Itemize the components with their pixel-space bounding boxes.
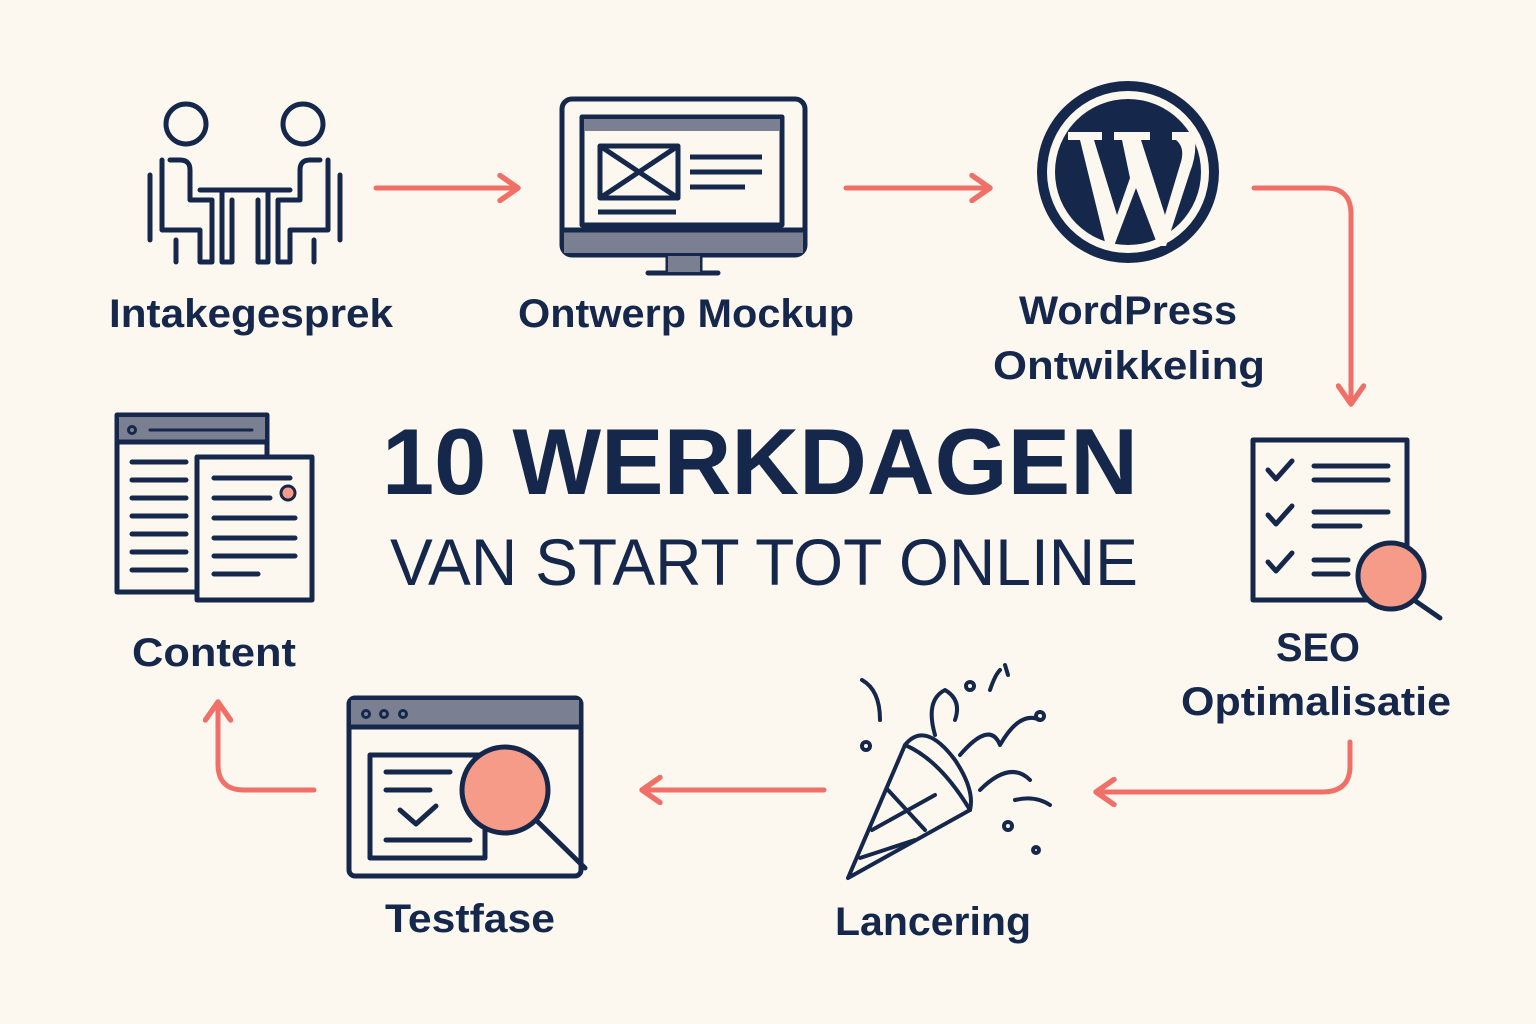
label: WordPress Ontwikkeling: Ontwikkeling (993, 344, 1265, 388)
arrow 4 (1096, 742, 1350, 792)
label: Content: Content (132, 631, 296, 675)
title: 10 WERKDAGEN (382, 409, 1138, 514)
label: SEO Optimalisatie (1181, 626, 1451, 724)
icon: SEO checklist (1253, 440, 1440, 618)
label: Intakegesprek: Intakegesprek (109, 292, 394, 336)
label: SEO Optimalisatie: SEO (1276, 626, 1360, 670)
icon: test browser (349, 698, 585, 876)
icon: WordPress logo (1037, 81, 1219, 263)
arrow 3 (1254, 188, 1351, 404)
label: SEO Optimalisatie: Optimalisatie (1181, 680, 1451, 724)
label: WordPress Ontwikkeling: WordPress (1019, 289, 1237, 333)
icon: monitor mockup (562, 99, 805, 273)
label: Lancering: Lancering (835, 900, 1031, 944)
arrow 2 (846, 186, 990, 190)
label: WordPress Ontwikkeling (993, 289, 1265, 388)
icon: content documents (117, 415, 312, 600)
arrow 1 (376, 186, 518, 190)
label: Testfase: Testfase (385, 897, 555, 941)
icon: party popper (848, 665, 1050, 878)
icon: intake meeting (150, 104, 340, 262)
arrow 5 (642, 788, 824, 792)
arrow 6 (218, 702, 314, 790)
title (382, 409, 1138, 599)
label: Ontwerp Mockup: Ontwerp Mockup (518, 292, 854, 336)
subtitle: VAN START TOT ONLINE (390, 525, 1138, 599)
